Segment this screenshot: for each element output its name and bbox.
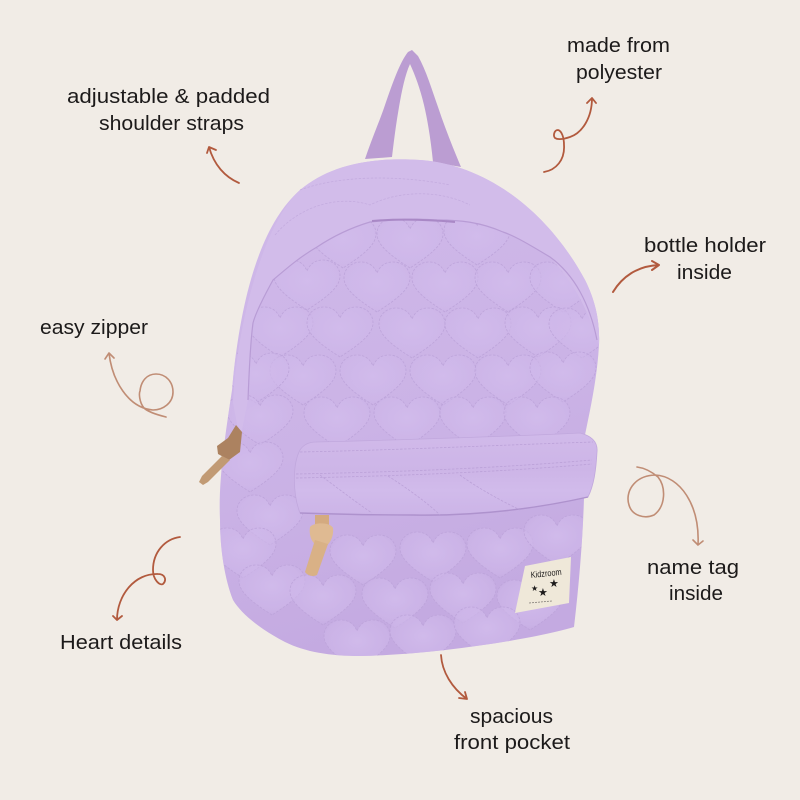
side zipper pull: [199, 425, 242, 485]
arrow: to heart details: [113, 537, 180, 620]
arrow: to polyester: [544, 98, 596, 172]
text: heart details: Heart details: [60, 632, 182, 654]
arrow: to front pocket: [441, 655, 467, 699]
main zipper track: [372, 220, 455, 222]
text: bottle holder inside: bottle holder: [644, 235, 766, 257]
text: adjustable and padded shoulder straps: shoulder straps: [99, 113, 244, 135]
quilted heart pattern: [220, 220, 598, 656]
flap quilting: [275, 178, 470, 235]
text: name tag inside: [647, 557, 739, 605]
label stars: ★: [531, 584, 538, 593]
zipper strap upper: [315, 515, 329, 527]
text: adjustable and padded shoulder straps: [67, 86, 270, 135]
text: spacious front pocket: front pocket: [454, 732, 570, 754]
arrow: to shoulder straps: [207, 147, 239, 183]
text: name tag inside: name tag: [647, 557, 739, 579]
label stars: ★: [549, 578, 559, 590]
flap seam shadow: [248, 219, 597, 400]
pocket flap lower shadow: [300, 497, 588, 515]
label stars: [531, 578, 559, 599]
label stars: ★: [538, 587, 548, 599]
label small print: [529, 601, 552, 603]
text: spacious front pocket: spacious: [470, 706, 553, 728]
text: bottle holder inside: inside: [677, 262, 732, 284]
text: adjustable and padded shoulder straps: adjustable & padded: [67, 86, 270, 108]
arrow: to easy zipper: [105, 353, 173, 417]
text: made from polyester: made from: [567, 35, 670, 57]
zipper tab: [305, 540, 328, 576]
text: bottle holder inside: [644, 235, 766, 284]
top flap: [233, 159, 599, 440]
text: made from polyester: polyester: [576, 62, 662, 84]
text: spacious front pocket: [454, 706, 570, 754]
backpack illustration: [199, 50, 615, 670]
text: made from polyester: [567, 35, 670, 84]
text: easy zipper: easy zipper: [40, 317, 148, 339]
zipper strap upper: [217, 425, 242, 460]
brand label patch: [515, 557, 571, 613]
front pocket flap: [294, 433, 597, 515]
pocket flap stitching: [296, 442, 593, 515]
top carry handle: [365, 50, 461, 167]
arrow: to name tag: [628, 467, 703, 545]
label brand text: Kidzroom: [530, 567, 562, 580]
front zipper pull: [305, 515, 333, 576]
arrow: to bottle holder: [613, 261, 659, 292]
zipper ring: [310, 523, 333, 548]
text: name tag inside: inside: [669, 583, 723, 605]
zipper strap lower: [199, 456, 230, 485]
backpack body: [220, 159, 599, 656]
